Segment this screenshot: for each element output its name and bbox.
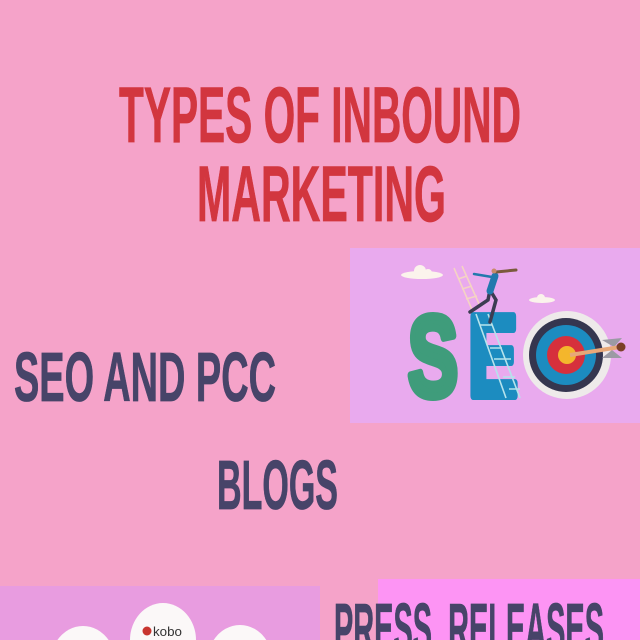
letter S: S xyxy=(408,294,458,421)
infographic canvas: BLOGS xyxy=(217,446,338,524)
letter E: E xyxy=(468,291,518,421)
title xyxy=(119,70,521,238)
icon: ladder over E xyxy=(476,314,520,398)
icon: kobo circle: kobo xyxy=(153,624,182,639)
panel: SEO illustration xyxy=(350,248,640,423)
panel: press releases backdrop xyxy=(378,579,640,640)
heading: SEO and PCC: SEO AND PCC xyxy=(14,338,276,416)
icon: kobo circle xyxy=(130,603,196,640)
icon: person with telescope xyxy=(470,268,516,322)
icon: left circle xyxy=(57,626,109,640)
icon: right circle xyxy=(214,625,266,640)
icon: target with arrow xyxy=(523,311,626,399)
icon: clouds xyxy=(401,265,555,303)
icon: ladder above the letters xyxy=(454,266,480,312)
panel: book stores xyxy=(0,586,320,640)
